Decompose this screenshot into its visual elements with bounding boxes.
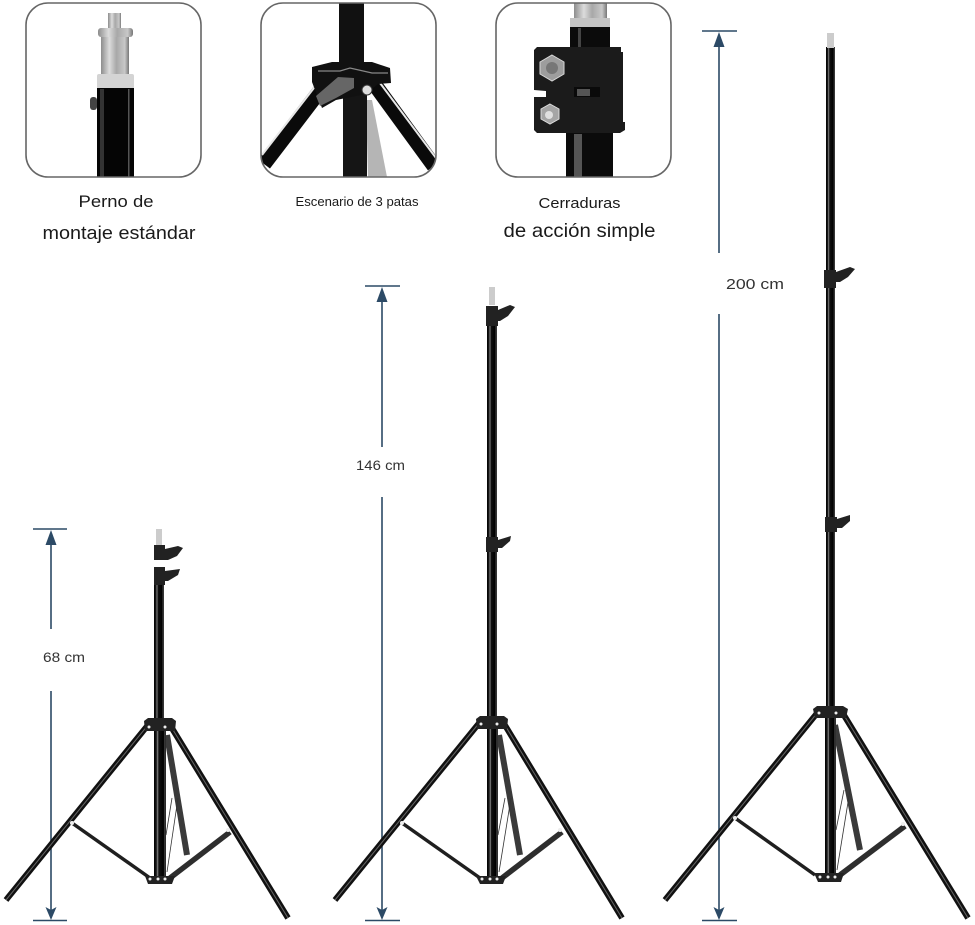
caption: 3-leg stage: Escenario de 3 patas <box>296 195 418 209</box>
caption: mounting bolt: Perno de <box>78 193 154 211</box>
right leg <box>170 725 288 918</box>
caption: locks: de acción simple <box>504 220 656 242</box>
struts <box>72 823 230 878</box>
rear leg <box>835 725 860 850</box>
panel: mounting bolt photo <box>26 3 201 178</box>
tripod: 68 cm <box>6 529 288 918</box>
left leg <box>335 722 480 900</box>
dimension: 68 cm <box>33 529 85 920</box>
icon: threaded bolt <box>97 13 134 89</box>
locks <box>486 305 515 552</box>
panel: 3-leg hub photo <box>261 3 436 177</box>
icon: left leg <box>262 84 322 164</box>
caption: locks <box>504 195 656 242</box>
top pin <box>827 33 834 48</box>
dimension: 146 cm: 146 cm <box>356 457 405 473</box>
rear leg <box>499 735 520 855</box>
caption: mounting bolt: montaje estándar <box>42 223 196 243</box>
dimension: 146 cm <box>356 286 405 920</box>
hubs <box>400 716 562 884</box>
centre pole <box>825 47 836 873</box>
icon: clamp body <box>534 47 625 133</box>
right leg <box>503 722 622 918</box>
rear leg <box>167 735 187 855</box>
locks <box>154 545 183 585</box>
icon: hub with lever <box>312 62 391 108</box>
icon: side knob <box>90 97 97 110</box>
struts <box>402 823 562 878</box>
top pin <box>489 287 495 305</box>
dimension: 200 cm <box>702 31 784 920</box>
hubs <box>70 718 230 884</box>
struts <box>735 818 905 875</box>
tripod: 200 cm <box>665 33 968 918</box>
dimension: 68 cm: 68 cm <box>43 649 85 665</box>
right leg <box>842 712 968 918</box>
top pin <box>156 529 162 545</box>
icon: right leg <box>375 83 436 166</box>
caption: locks: Cerraduras <box>538 195 620 212</box>
caption: mounting bolt <box>42 193 196 243</box>
locks <box>824 267 855 532</box>
dimension: 200 cm: 200 cm <box>726 277 784 293</box>
icon: silver rear brace <box>366 100 387 177</box>
centre pole <box>487 322 498 876</box>
icon: lower pole <box>566 132 613 178</box>
icon: black pole <box>97 88 134 178</box>
left leg <box>665 712 818 900</box>
panel: lock clamp photo <box>496 3 671 178</box>
left leg <box>6 725 148 900</box>
hubs <box>733 706 905 882</box>
icon: upper bolt <box>540 55 564 81</box>
icon: central pole <box>339 3 367 177</box>
centre pole <box>154 585 166 877</box>
tripod: 146 cm <box>335 287 622 918</box>
icon: lower bolt <box>541 104 559 124</box>
icon: upper pole with silver collar <box>570 3 610 49</box>
